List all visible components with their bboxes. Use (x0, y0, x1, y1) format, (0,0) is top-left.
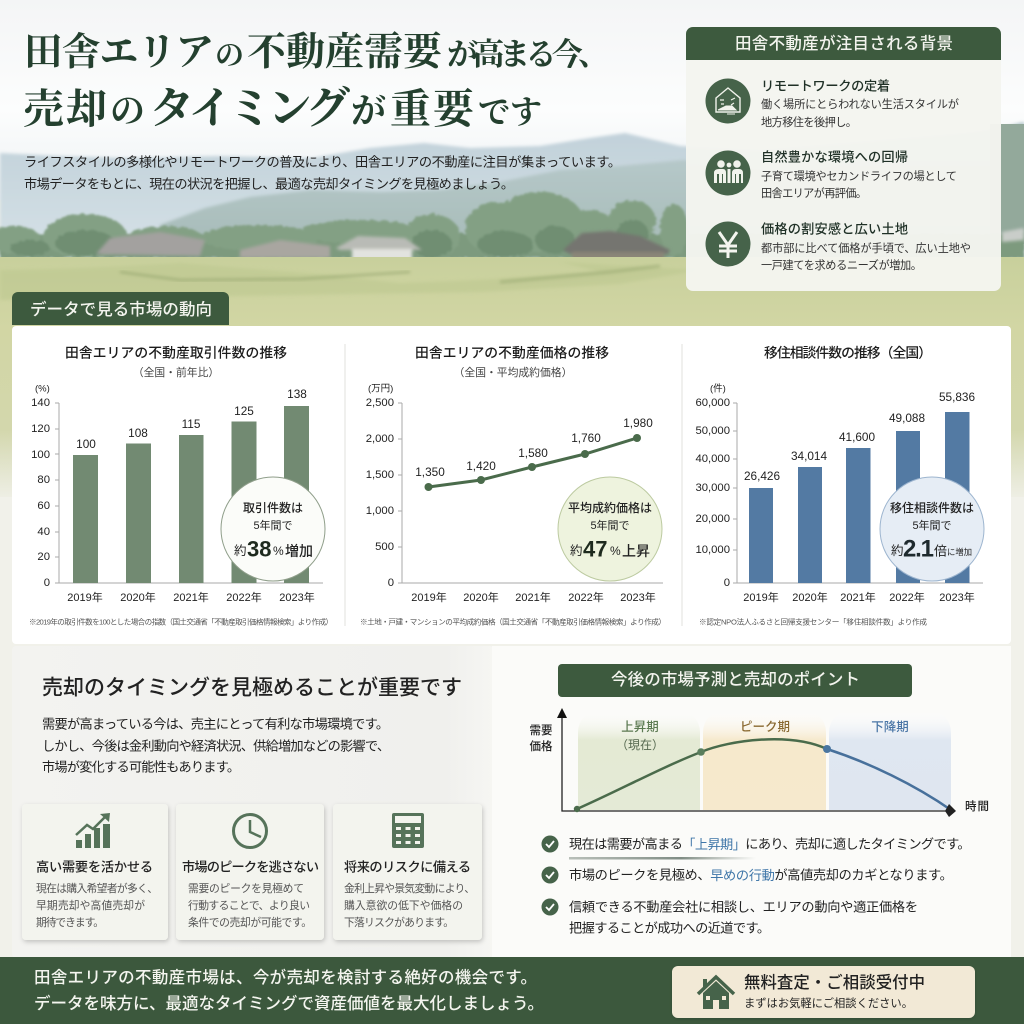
callout: 47%: 上昇 (622, 543, 650, 559)
callout: 2.1x: 移住相談件数は (890, 500, 974, 515)
intro text: ライフスタイルの多様化やリモートワークの普及により、田舎エリアの不動産に注目が集まっています。 (24, 154, 621, 170)
chart: transactions: 108 (128, 426, 148, 440)
panel: background reasons (686, 27, 1001, 291)
callout: 47%: 47 (583, 536, 607, 562)
chart: relocation consultations: 2019年 (743, 590, 779, 604)
chart: price: 500 (375, 541, 394, 553)
chart: transactions: 125 (234, 404, 254, 418)
tree line (0, 192, 1024, 258)
intro text: 市場データをもとに、現在の状況を把握し、最適な売却タイミングを見極めましょう。 (24, 176, 514, 192)
card: future risk (333, 804, 482, 940)
forecast heading: 今後の市場予測と売却のポイント (611, 670, 860, 689)
callout: 2.1x: 5年間で (912, 518, 952, 532)
title: 重要 (390, 76, 476, 135)
chart: price: 田舎エリアの不動産価格の推移 (415, 344, 609, 360)
chart: relocation consultations: 20,000 (695, 513, 730, 525)
icon: calculator (392, 813, 424, 848)
chart: relocation consultations: 0 (724, 577, 730, 589)
item 2: 田舎エリアが再評価。 (761, 186, 867, 200)
card: market peak (176, 804, 324, 940)
chart: relocation consultations: ※認定NPO法人ふるさと回帰支援センター「移住相談件数」より作成 (699, 616, 927, 626)
chart: market cycle: 需要 (530, 724, 552, 737)
title: 田舎エリア (24, 22, 214, 77)
icon: growth chart (76, 813, 110, 848)
panel: forecast (492, 646, 1011, 958)
chart: transactions: 2023年 (279, 590, 315, 604)
icon: clock (234, 814, 266, 848)
chart: market cycle (530, 708, 989, 817)
panel: selling timing (12, 646, 494, 958)
item 1: 働く場所にとらわれない生活スタイルが (761, 97, 959, 111)
check list (542, 836, 970, 936)
chart: price: 1,760 (571, 431, 601, 445)
item 3: 一戸建てを求めるニーズが増加。 (761, 258, 922, 272)
chart: transactions: 120 (31, 423, 50, 435)
callout: 47%: 5年間で (590, 518, 630, 532)
icon: family (706, 150, 750, 196)
chart: transactions: 2020年 (120, 590, 156, 604)
chart: relocation consultations: 30,000 (695, 482, 730, 494)
footer message (34, 967, 544, 1013)
callout: 2.1x: 倍 (934, 544, 947, 558)
card: high demand: 期待できます。 (36, 915, 104, 929)
icon: yen (706, 222, 750, 266)
callout: 38%: 増加 (285, 543, 313, 559)
title: タイミング (150, 72, 350, 136)
callout: 47%: 平均成約価格は (568, 500, 652, 515)
chart: price: 2020年 (463, 590, 499, 604)
card: future risk: 金利上昇や景気変動により、 (344, 881, 475, 895)
callout: 38%: 約 (234, 543, 247, 558)
chart: transactions: 100 (31, 449, 50, 461)
point 3: 把握することが成功への近道です。 (569, 920, 770, 936)
title: が高まる今、 (447, 29, 609, 74)
card: market peak: 市場のピークを逃さない (182, 858, 319, 874)
card: future risk: 下落リスクがあります。 (344, 915, 454, 929)
chart: price: 1,500 (366, 469, 394, 481)
chart: price: 0 (388, 577, 394, 589)
chart: price (360, 344, 666, 626)
chart: price: 1,980 (623, 416, 653, 430)
item 2: 子育て環境やセカンドライフの場として (761, 170, 957, 183)
point 3 (542, 898, 918, 936)
callout: 47% (558, 477, 662, 581)
point 1 (542, 836, 970, 860)
card: high demand: 高い需要を活かせる (36, 858, 153, 874)
call to action (672, 966, 975, 1018)
chart: transactions: 2021年 (173, 590, 209, 604)
title (23, 21, 609, 136)
body text (42, 716, 390, 774)
body text: 市場が変化する可能性もあります。 (42, 760, 240, 774)
item 1: リモートワークの定着 (761, 78, 890, 94)
chart: relocation consultations: 34,014 (791, 449, 827, 463)
chart: relocation consultations: 55,836 (939, 390, 975, 404)
chart: market cycle: 上昇期 (621, 720, 659, 734)
chart: transactions: ※2019年の取引件数を100とした場合の指数（国土交通省「不動産取引価格情報検索」より作成） (29, 616, 333, 626)
chart: relocation consultations: 2023年 (939, 590, 975, 604)
title: 売却 (23, 76, 107, 135)
point 3: 信頼できる不動産会社に相談し、エリアの動向や適正価格を (569, 900, 918, 914)
chart: transactions: 20 (37, 551, 50, 563)
chart: relocation consultations: 41,600 (839, 430, 875, 444)
chart: price: ※土地・戸建・マンションの平均成約価格（国土交通省「不動産取引価格情報検索」より作成） (360, 616, 666, 626)
card: future risk: 購入意欲の低下や価格の (344, 898, 463, 912)
chart: price: 2,500 (366, 397, 394, 409)
call to action: まずはお気軽にご相談ください。 (744, 996, 913, 1010)
callout: 38%: 38 (247, 536, 271, 562)
footer message: データを味方に、最適なタイミングで資産価値を最大化しましょう。 (34, 993, 544, 1013)
callout: 47%: % (610, 544, 621, 558)
chart: price: 2,000 (366, 433, 394, 445)
chart: relocation consultations: 40,000 (695, 453, 730, 465)
chart: price: 2023年 (620, 590, 656, 604)
chart: transactions: 80 (37, 474, 50, 486)
chart: relocation consultations: 50,000 (695, 425, 730, 437)
callout: 38%: 5年間で (253, 518, 293, 532)
card: market peak: 行動することで、より良い (188, 898, 310, 912)
panel: market data (12, 292, 1011, 644)
point 2: 市場のピークを見極め、早めの行動が高値売却のカギとなります。 (569, 866, 952, 882)
chart: transactions: 0 (44, 577, 50, 589)
card: market peak: 需要のピークを見極めて (188, 881, 304, 895)
footer message: 田舎エリアの不動産市場は、今が売却を検討する絶好の機会です。 (34, 967, 537, 987)
title: の (215, 33, 244, 74)
chart: price: 1,580 (518, 446, 548, 460)
chart: market cycle: 時間 (965, 799, 989, 813)
footer band (0, 957, 1024, 1024)
item 3: 都市部に比べて価格が手頃で、広い土地や (761, 241, 971, 255)
card: high demand (22, 804, 168, 940)
chart: transactions: 田舎エリアの不動産取引件数の推移 (65, 344, 287, 360)
item 3 (761, 220, 971, 272)
callout: 2.1x: に増加 (947, 547, 972, 557)
call to action: 無料査定・ご相談受付中 (744, 973, 925, 992)
section tab (12, 292, 229, 325)
chart: relocation consultations: 2020年 (792, 590, 828, 604)
forecast heading (558, 664, 912, 697)
item 3: 価格の割安感と広い土地 (761, 220, 908, 236)
chart: relocation consultations: 移住相談件数の推移（全国） (764, 344, 932, 360)
chart: transactions: 2019年 (67, 590, 103, 604)
chart: relocation consultations: 10,000 (695, 544, 730, 556)
chart: relocation consultations: 2022年 (889, 590, 925, 604)
icon: house (698, 977, 734, 1009)
chart: transactions: 140 (31, 397, 50, 409)
card: high demand: 現在は購入希望者が多く、 (36, 881, 158, 895)
chart: price: 1,420 (466, 459, 496, 473)
chart: price: 1,350 (415, 465, 445, 479)
section tab: データで見る市場の動向 (30, 299, 212, 319)
intro text (24, 154, 621, 192)
houses (96, 228, 1024, 262)
title: が (351, 84, 386, 134)
callout: 2.1x: 約 (891, 543, 904, 558)
chart: transactions: 100 (76, 437, 96, 451)
chart: relocation consultations: 60,000 (695, 397, 730, 409)
icon: remote work house (706, 78, 750, 124)
card: market peak: 条件での売却が可能です。 (188, 915, 312, 929)
chart: relocation consultations: 49,088 (889, 411, 925, 425)
title: の (110, 84, 145, 134)
chart: transactions: 2022年 (226, 590, 262, 604)
chart: market cycle: ピーク期 (740, 720, 790, 734)
card: future risk: 将来のリスクに備える (344, 860, 471, 874)
item 1: 地方移住を後押し。 (761, 115, 857, 129)
body text: 需要が高まっている今は、売主にとって有利な市場環境です。 (42, 716, 389, 732)
chart: price: 2021年 (515, 590, 551, 604)
body text: しかし、今後は金利動向や経済状況、供給増加などの影響で、 (42, 738, 390, 754)
chart: transactions: （全国・前年比） (133, 365, 219, 379)
point 1: 現在は需要が高まる「上昇期」にあり、売却に適したタイミングです。 (569, 836, 970, 852)
chart: relocation consultations: (件) (710, 382, 726, 394)
chart: market cycle: 下降期 (871, 719, 909, 734)
item 2 (761, 148, 957, 200)
chart: price: (万円) (368, 384, 393, 394)
card: high demand: 早期売却や高値売却が (36, 898, 145, 912)
callout: 47%: 約 (570, 543, 583, 558)
chart: transactions: 138 (287, 387, 307, 401)
chart: relocation consultations: 2021年 (840, 590, 876, 604)
chart: transactions: (%) (35, 384, 50, 394)
item 2: 自然豊かな環境への回帰 (761, 148, 908, 164)
title: です (478, 87, 542, 133)
chart: price: （全国・平均成約価格） (454, 365, 572, 379)
callout: 2.1x: 2.1 (903, 536, 934, 562)
panel heading: 田舎不動産が注目される背景 (735, 33, 953, 53)
chart: market cycle: 価格 (530, 739, 553, 753)
item 1 (761, 78, 959, 129)
callout: 38%: 取引件数は (243, 500, 303, 515)
callout: 38%: % (273, 544, 284, 558)
title: 不動産需要 (247, 21, 443, 77)
chart: price: 2022年 (568, 590, 604, 604)
callout: 38% (221, 477, 325, 581)
chart: transactions: 115 (182, 417, 201, 431)
chart: transactions: 60 (37, 500, 50, 512)
chart: transactions (29, 344, 333, 626)
chart: transactions: 40 (37, 526, 50, 538)
chart: relocation consultations: 26,426 (744, 469, 780, 483)
heading: timing: 売却のタイミングを見極めることが重要です (42, 676, 462, 700)
chart: relocation consultations (695, 344, 984, 626)
chart: price: 1,000 (366, 505, 394, 517)
callout: 2.1x (880, 477, 984, 581)
chart: price: 2019年 (411, 590, 447, 604)
chart: market cycle: （現在） (616, 738, 664, 752)
